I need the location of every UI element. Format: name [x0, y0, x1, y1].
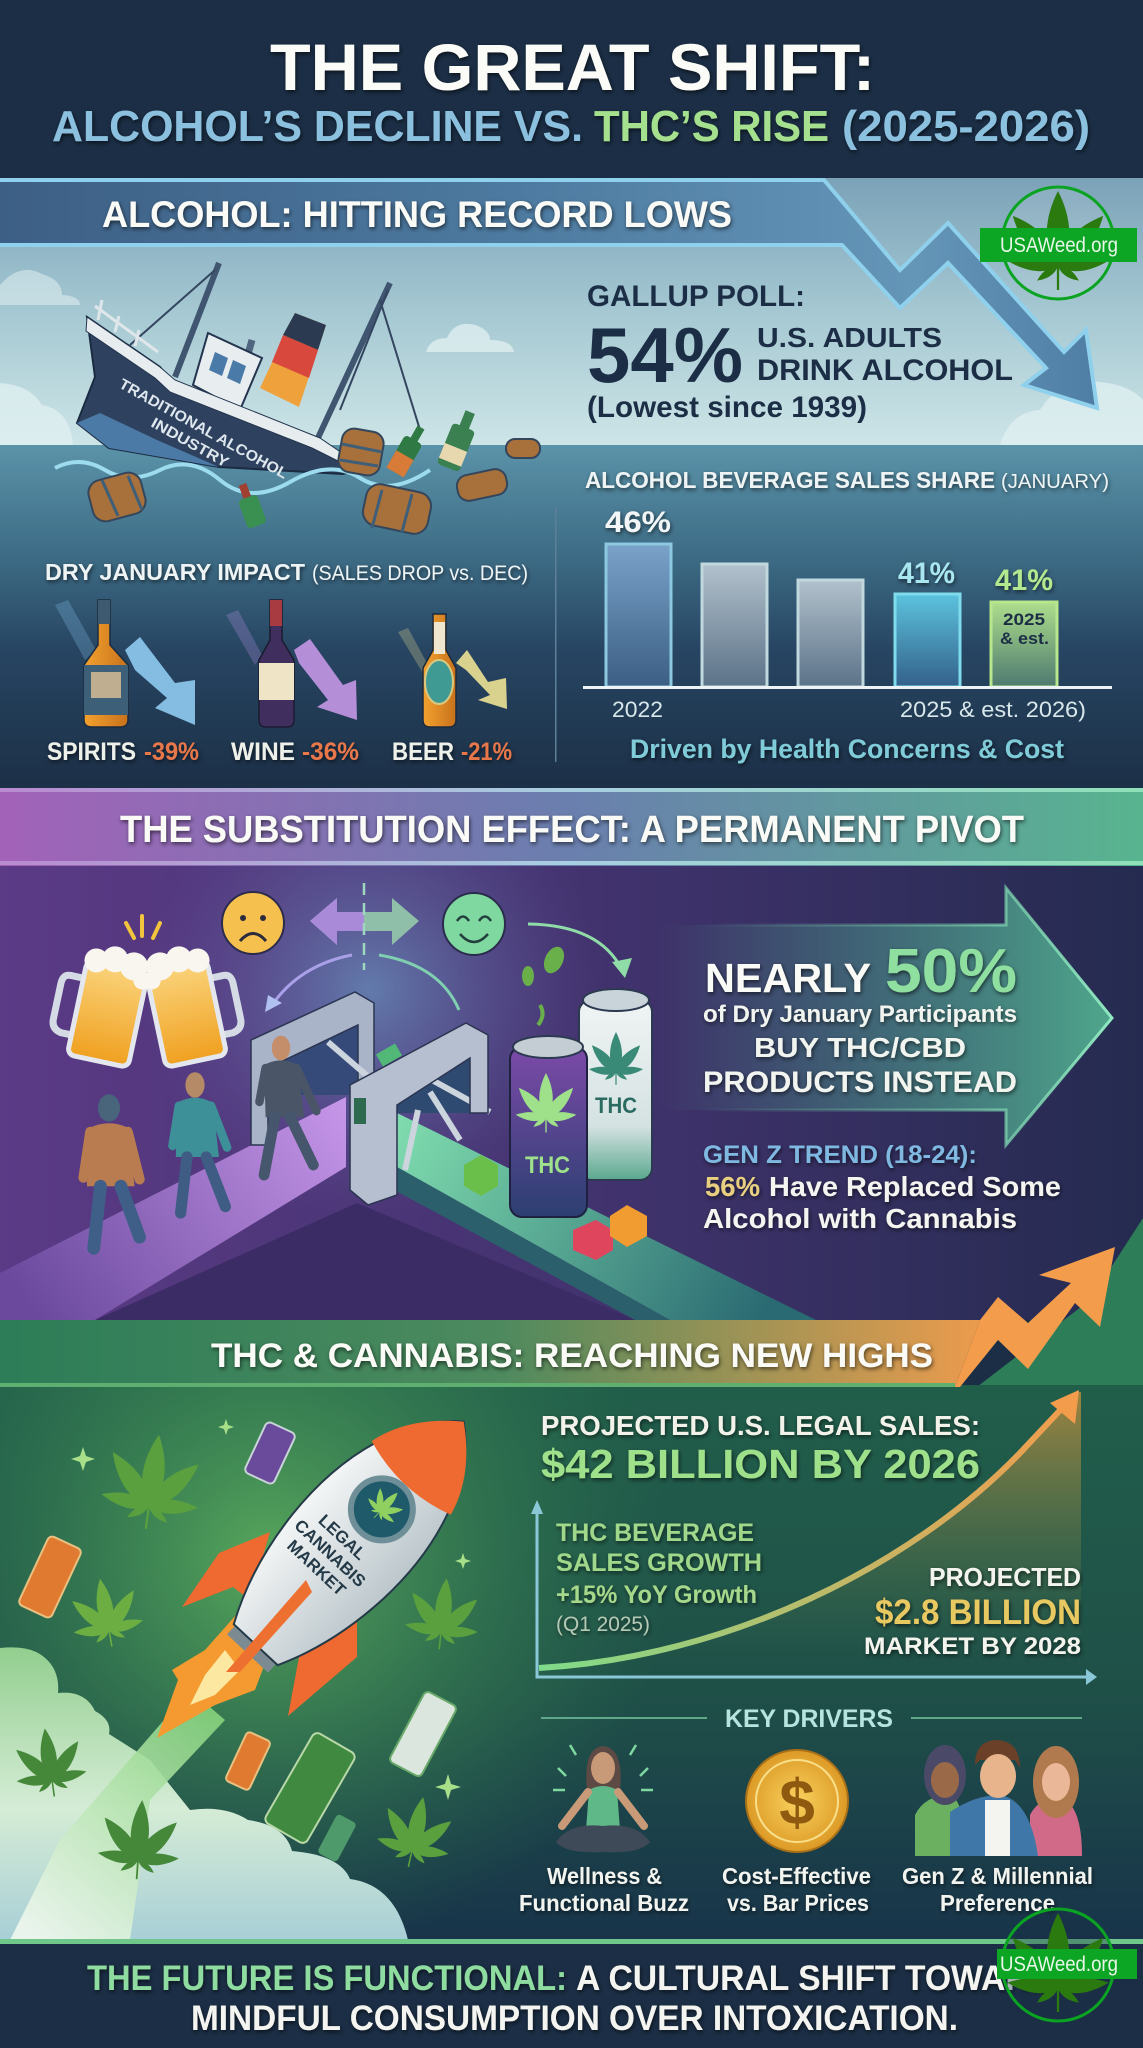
stat text: nearly 50%: PRODUCTS INSTEAD: [703, 1066, 1017, 1099]
icon: purple THC can: [510, 1036, 587, 1217]
sparkles: [71, 1419, 471, 1800]
logo: USAWeed.org top: USAWeed.org: [1000, 234, 1118, 257]
bar chart: alcohol sales share: 2025 & est. 2026): [900, 697, 1086, 722]
dry january percentages: SPIRITS: [47, 738, 136, 766]
gate front: [350, 1023, 490, 1205]
projected sales heading: $42 BILLION BY 2026: [541, 1441, 980, 1487]
projected sales heading: PROJECTED U.S. LEGAL SALES:: [541, 1410, 980, 1441]
driver labels: Functional Buzz: [519, 1890, 689, 1916]
subtitle: ALCOHOL’S DECLINE VS.: [52, 102, 583, 151]
headline stat: Gallup poll: DRINK ALCOHOL: [757, 354, 1013, 387]
rocket label: MARKET: [283, 1536, 350, 1600]
bar chart: alcohol sales share: 41%: [995, 564, 1053, 597]
dry january heading: [45, 559, 528, 585]
icon: clinking beer mugs: [47, 916, 247, 1068]
driver labels: Preference: [940, 1890, 1055, 1916]
chart label: beverage growth: [556, 1519, 762, 1636]
driver labels: Wellness &: [547, 1863, 662, 1889]
ship name: INDUSTRY: [148, 415, 232, 471]
driver labels: Cost-Effective: [722, 1863, 871, 1889]
person: rear: [84, 1094, 140, 1248]
chart label: projected market: MARKET BY 2028: [864, 1633, 1081, 1660]
falling arrow banner: [0, 180, 1097, 408]
barrels and bottles: [85, 408, 540, 536]
bar chart heading: (JANUARY): [1001, 471, 1109, 493]
dark floor under gate: [95, 1203, 635, 1320]
cannabis leaves: [9, 1428, 484, 1882]
icon: smile face: [443, 893, 505, 955]
icon: double arrow: [310, 883, 419, 970]
dry january heading: (SALES DROP vs. DEC): [312, 562, 528, 585]
panel: cannabis section: [0, 1218, 1143, 1942]
big green arrow: [656, 888, 1112, 1145]
ship name: TRADITIONAL ALCOHOL: [116, 376, 290, 483]
panel: alcohol section: [0, 178, 1143, 788]
logo: USAWeed.org bottom: USAWeed.org: [1000, 1953, 1118, 1976]
waves: [55, 462, 430, 493]
chart caption: Driven by Health Concerns & Cost: [630, 734, 1064, 764]
headline stat: Gallup poll: [587, 280, 1013, 424]
panel: footer: [0, 1909, 1143, 2048]
chart label: projected market: PROJECTED: [929, 1562, 1081, 1592]
bar chart: alcohol sales share: 2025: [1003, 610, 1045, 629]
icon: three young people: [915, 1740, 1082, 1856]
rocket label: CANNABIS: [291, 1516, 369, 1591]
smoke cloud: [0, 1647, 408, 1940]
icon: wine bottle with arrow: [226, 600, 357, 727]
stat text: Gen Z trend: Have Replaced Some: [769, 1171, 1061, 1202]
chart label: beverage growth: (Q1 2025): [556, 1613, 650, 1636]
rocket label: LEGAL: [315, 1511, 370, 1564]
icon: sad face: [222, 892, 284, 954]
chart label: projected market: $2.8 BILLION: [875, 1593, 1081, 1632]
icon: meditating woman: [553, 1745, 653, 1852]
section heading: ALCOHOL: HITTING RECORD LOWS: [102, 194, 732, 235]
stat text: nearly 50%: [703, 937, 1017, 1099]
subtitle: [52, 102, 1090, 151]
bar chart: alcohol sales share: [583, 506, 1112, 722]
curved arrows: [265, 924, 632, 1012]
headline stat: Gallup poll: 54%: [587, 311, 743, 399]
growth chart: [531, 1390, 1097, 1685]
dry january percentages: WINE: [231, 738, 295, 766]
porthole: [338, 1466, 426, 1553]
bar chart: alcohol sales share: 46%: [605, 506, 671, 539]
stat text: nearly 50%: BUY THC/CBD: [754, 1032, 966, 1063]
stat text: Gen Z trend: [703, 1141, 1061, 1234]
icon: beer bottle with arrow: [398, 614, 507, 727]
headline stat: Gallup poll: (Lowest since 1939): [587, 391, 867, 424]
gate back: [251, 992, 374, 1145]
flame: [157, 1615, 270, 1738]
driver labels: [519, 1863, 1093, 1916]
bar chart: alcohol sales share: & est.: [1000, 629, 1049, 648]
footer message: A CULTURAL SHIFT TOWARD: [576, 1959, 1054, 1998]
icon: white THC can: THC: [595, 1093, 637, 1118]
subtitle: THC’S RISE: [594, 102, 829, 151]
chart label: beverage growth: THC BEVERAGE: [556, 1519, 754, 1547]
footer message: [87, 1959, 1054, 2038]
center fin: [226, 1580, 312, 1672]
bar chart heading: ALCOHOL BEVERAGE SALES SHARE: [585, 467, 995, 493]
banner heading: THC & CANNABIS: REACHING NEW HIGHS: [211, 1337, 933, 1375]
footer message: MINDFUL CONSUMPTION OVER INTOXICATION.: [191, 1999, 958, 2038]
title: THE GREAT SHIFT:: [270, 30, 875, 104]
dry january percentages: -39%: [144, 738, 199, 766]
icon: spirits bottle with arrow: [55, 600, 195, 727]
purple walkway: [0, 1097, 346, 1320]
driver labels: Gen Z & Millennial: [902, 1863, 1093, 1889]
headline stat: Gallup poll: GALLUP POLL:: [587, 280, 805, 313]
stat text: Gen Z trend: GEN Z TREND (18-24):: [703, 1141, 977, 1169]
panel: header: [0, 0, 1143, 178]
logo: USAWeed.org top: [980, 187, 1137, 299]
dry january percentages: -36%: [302, 738, 359, 766]
subtitle: (2025-2026): [842, 102, 1090, 151]
divider: [555, 508, 556, 762]
stat text: nearly 50%: NEARLY: [705, 955, 871, 1001]
panel: substitution effect: [0, 866, 1143, 1320]
chart label: beverage growth: SALES GROWTH: [556, 1549, 762, 1577]
illustration: sinking ship: [77, 263, 420, 483]
panel: substitution banner: [0, 788, 1143, 866]
icon: gold dollar coin: [746, 1750, 848, 1852]
footer message: THE FUTURE IS FUNCTIONAL:: [87, 1959, 567, 1998]
logo: USAWeed.org bottom: [997, 1909, 1137, 2021]
exhaust trail: [10, 1690, 225, 1940]
dry january heading: DRY JANUARY IMPACT: [45, 559, 305, 585]
stat text: nearly 50%: of Dry January Participants: [703, 1001, 1017, 1028]
stat text: Gen Z trend: 56%: [705, 1171, 760, 1202]
banner heading: THE SUBSTITUTION EFFECT: A PERMANENT PIVOT: [120, 809, 1024, 851]
rocket label: [277, 1501, 383, 1605]
dry january percentages: -21%: [461, 738, 512, 766]
headline stat: Gallup poll: U.S. ADULTS: [757, 322, 942, 353]
chart label: beverage growth: +15% YoY Growth: [556, 1581, 757, 1609]
fins: [182, 1532, 357, 1716]
icon: white THC can: [579, 989, 652, 1180]
stat text: Gen Z trend: Alcohol with Cannabis: [703, 1203, 1017, 1234]
small cans: [18, 1421, 458, 1863]
stat text: nearly 50%: 50%: [885, 937, 1017, 1006]
rocket: [201, 1379, 510, 1696]
projected sales heading: [541, 1410, 980, 1487]
chart label: projected market: [864, 1562, 1081, 1660]
driver labels: vs. Bar Prices: [727, 1890, 869, 1916]
clouds: [0, 270, 1143, 445]
icon: gold dollar coin: $: [779, 1766, 815, 1838]
key drivers heading: KEY DRIVERS: [725, 1705, 893, 1733]
person: front: [259, 1036, 316, 1175]
green walkway: [385, 1167, 670, 1320]
rising arrow banner: [0, 1320, 980, 1387]
person: middle: [173, 1072, 227, 1213]
icon: gummies and buds: [464, 944, 647, 1260]
bar chart: alcohol sales share: 2022: [612, 697, 663, 722]
bar chart: alcohol sales share: 41%: [898, 557, 955, 590]
dry january percentages: [47, 738, 512, 766]
icon: purple THC can: THC: [525, 1152, 570, 1179]
dry january percentages: BEER: [392, 738, 454, 766]
